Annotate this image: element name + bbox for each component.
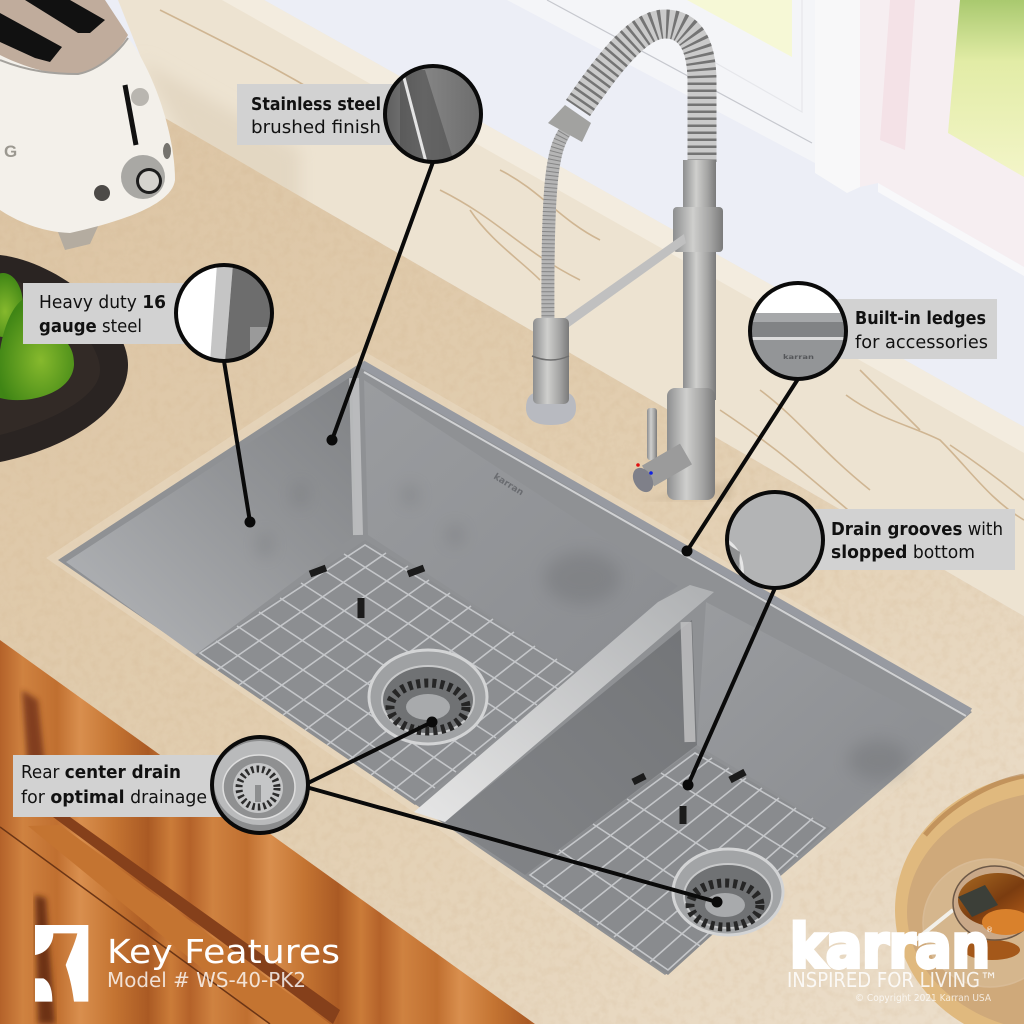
callout: rear center drain: for optimal drainage <box>21 788 207 808</box>
backsplash <box>118 0 1024 616</box>
zoom lens: steel edge <box>175 264 275 362</box>
spring <box>578 24 702 162</box>
saucer <box>923 859 1024 987</box>
callout: drain grooves <box>682 491 1015 790</box>
callout: heavy duty 16 gauge steel: gauge steel <box>39 317 142 337</box>
callout: built-in ledges: Built-in ledges <box>855 309 986 329</box>
left basin back wall <box>364 380 678 672</box>
tray with tea <box>895 773 1024 1024</box>
left window frame <box>507 0 815 163</box>
brand mark <box>35 925 88 1002</box>
sink <box>46 350 985 988</box>
zoom lens: strainer <box>212 737 310 835</box>
right basin left wall <box>445 620 697 875</box>
flexible hose <box>548 130 566 330</box>
callout: heavy duty 16 gauge steel: Heavy duty 16 <box>39 293 166 313</box>
zoom lens: groove <box>726 491 824 589</box>
fruit bowl <box>0 255 128 462</box>
callout: built-in ledges <box>682 282 997 556</box>
divider <box>414 585 714 822</box>
window mullion <box>815 0 860 193</box>
rim <box>362 364 970 712</box>
karran logo: karran <box>790 912 990 982</box>
right window glass <box>948 0 1024 177</box>
toaster: G <box>4 142 17 161</box>
callout: stainless steel brushed finish: brushed finish <box>251 118 381 138</box>
karran stamp: karran <box>491 472 525 498</box>
callout: rear center drain <box>13 716 722 908</box>
karran logo: © Copyright 2021 Karran USA <box>855 993 991 1004</box>
rack bumpers <box>310 568 745 824</box>
zoom lens: brushed steel <box>385 66 481 165</box>
right basin floor <box>525 748 830 975</box>
callout: stainless steel brushed finish: Stainless steel <box>251 95 381 115</box>
zoom lens: ledge: karran <box>783 353 814 361</box>
wall reflections <box>258 483 908 780</box>
callout: heavy duty 16 gauge steel <box>23 264 275 528</box>
right drain <box>673 849 783 935</box>
left basin left wall <box>66 376 356 655</box>
callout: rear center drain: Rear center drain <box>21 763 181 783</box>
left drain <box>369 650 487 744</box>
right window frame <box>860 0 1024 267</box>
callout: drain grooves: slopped bottom <box>831 543 975 563</box>
left basin floor <box>195 540 578 805</box>
left wire rack <box>200 545 573 800</box>
cabinet <box>0 640 535 1024</box>
title: key features: Key Features <box>107 932 340 971</box>
karran logo: INSPIRED FOR LIVING™ <box>787 968 998 992</box>
faucet <box>526 24 735 500</box>
karran logo: ® <box>986 926 993 934</box>
title: key features <box>107 932 340 992</box>
toaster <box>0 0 175 250</box>
tea glass <box>964 940 1020 960</box>
title: key features: Model # WS-40-PK2 <box>107 968 306 992</box>
zoom lens: ledge <box>749 282 847 380</box>
callout: stainless steel brushed finish <box>237 66 481 446</box>
right basin back wall <box>697 602 945 825</box>
callout: drain grooves: Drain grooves with <box>831 520 1003 540</box>
callout: built-in ledges: for accessories <box>855 333 988 353</box>
right wire rack <box>530 753 825 970</box>
